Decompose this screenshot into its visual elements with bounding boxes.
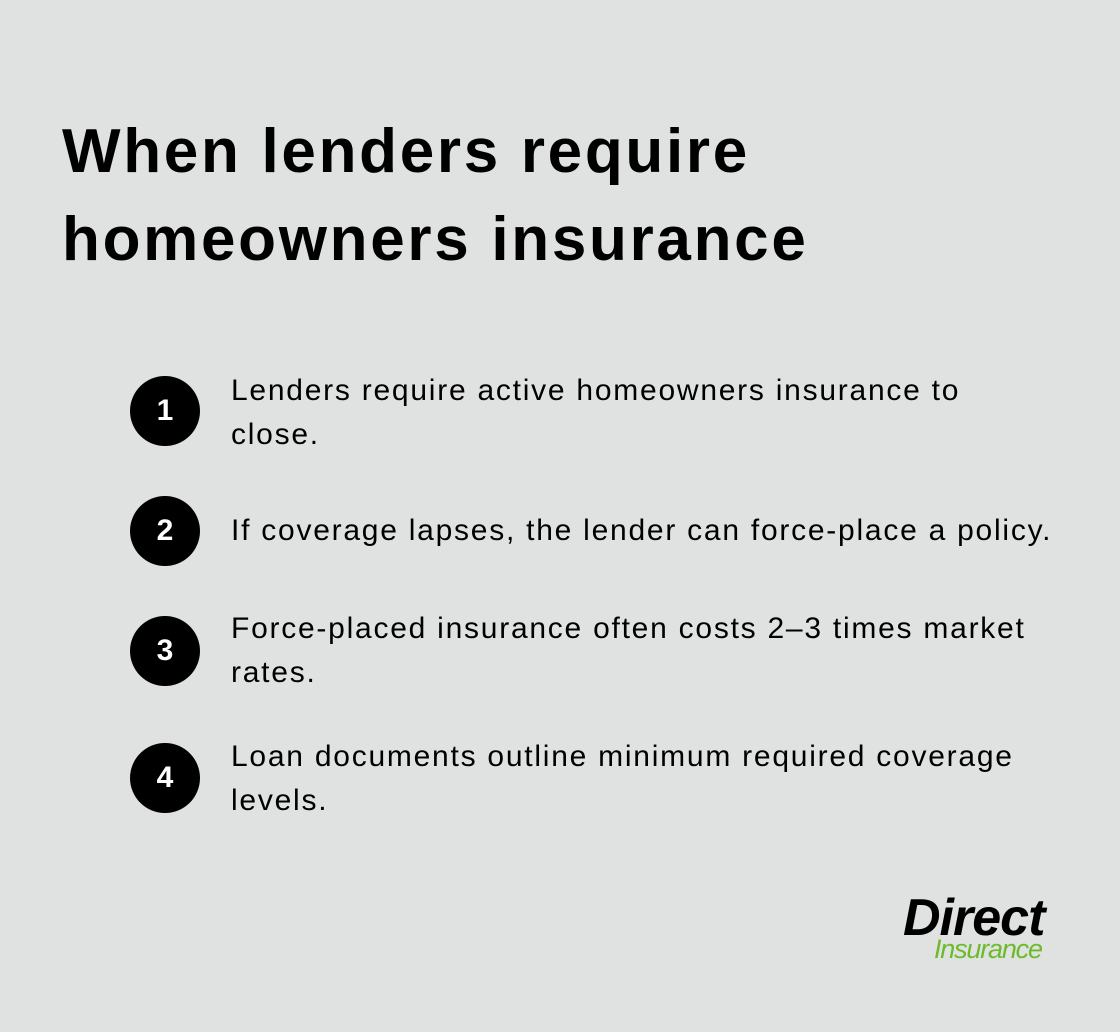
text 4: Loan documents outline minimum required coverage [231,740,1014,773]
item 2 [130,496,1052,566]
text 3: Force-placed insurance often costs 2–3 times market [231,612,1026,645]
title [62,117,809,274]
item 4 [130,740,1014,817]
text 3: rates. [231,656,317,689]
text 4 [231,740,1014,817]
title: homeowners insurance [62,205,809,274]
icon: number 4: 4 [157,761,173,794]
icon: number 3 [130,616,200,686]
icon: number 1: 1 [157,394,173,427]
icon: number 4 [130,743,200,813]
icon: number 2: 2 [157,514,173,547]
text 1: Lenders require active homeowners insurance to [231,374,960,407]
text 1: close. [231,418,320,451]
text 3 [231,612,1026,689]
item 3 [130,612,1026,689]
item 1 [130,374,960,451]
icon: number 1 [130,376,200,446]
icon: number 2 [130,496,200,566]
text 4: levels. [231,784,328,817]
icon: number 3: 3 [157,634,173,667]
text 2: If coverage lapses, the lender can force-place a policy. [231,514,1052,547]
logo: Direct [903,889,1044,947]
title: When lenders require [62,117,750,186]
logo: Insurance [934,934,1042,964]
text 1 [231,374,960,451]
